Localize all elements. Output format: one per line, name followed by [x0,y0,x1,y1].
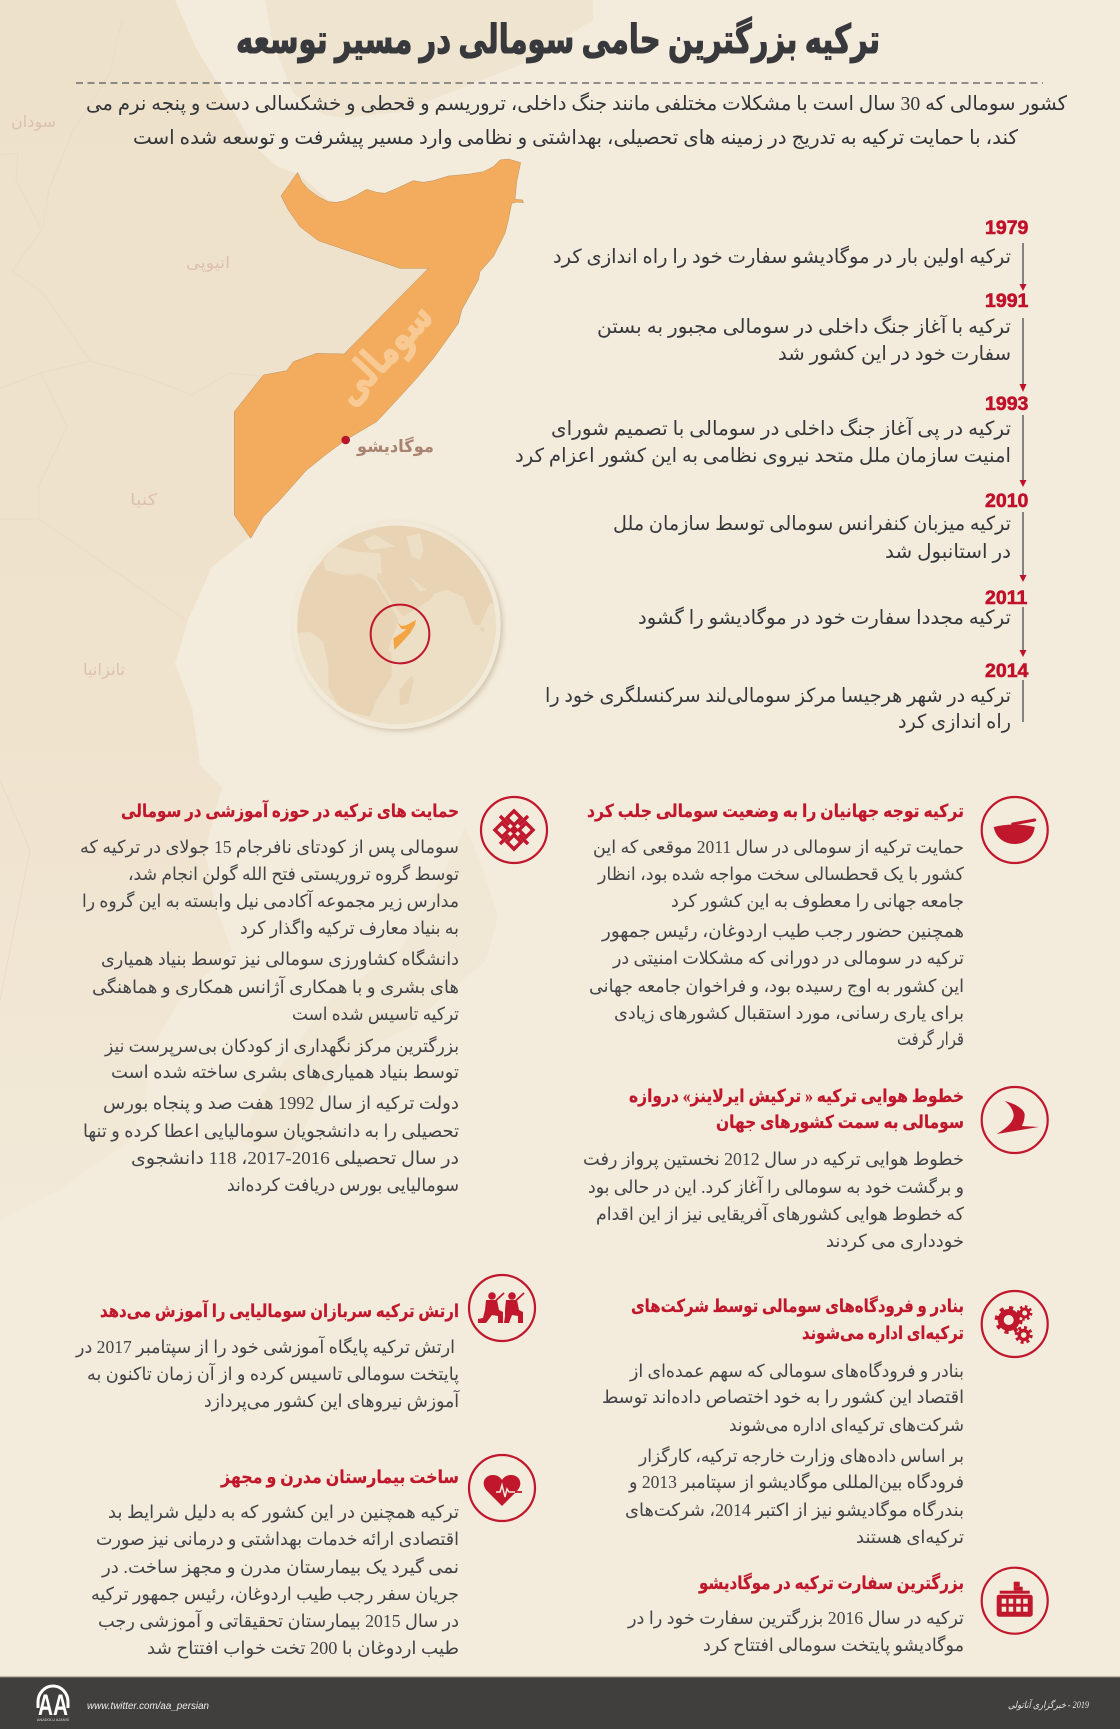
background map [0,0,593,1220]
timeline: 2010: ترکیه میزبان کنفرانس سومالی توسط سازمان ملل [613,514,1011,535]
heading: ارتش ترکیه سربازان سومالیایی را آموزش می‌دهد [100,1299,459,1322]
heading: سومالی به سمت کشورهای جهان [716,1112,964,1133]
map label: Somalia: سومالی [325,293,443,415]
timeline: 2014: راه اندازی کرد [898,712,1011,733]
body text: در سال 2015 بیمارستان تحقیقاتی و آموزشی رجب [98,1609,459,1632]
icon: embassy [982,1568,1048,1634]
body text: سومالیایی بورس دریافت کرده‌اند [227,1175,459,1196]
body text: برای یاری رسانی، مورد استقبال کشورهای زیادی [614,1003,964,1024]
panel: hospital [91,1455,535,1659]
body text: تحصیلی را به دانشجویان سومالیایی اعطا کرده و تنها [83,1121,459,1142]
body text [583,1149,964,1252]
footer [0,1677,1120,1729]
body text: قرار گرفت [897,1028,964,1050]
body text: و برگشت خود به سومالی را آغاز کرد. این در حالی بود [588,1175,964,1198]
intro text: کند، با حمایت ترکیه به تدریج در زمینه های تحصیلی، بهداشتی و نظامی وارد مسیر پیشرفت و توسعه شده است [133,127,1018,150]
body text: خودداری می کردند [826,1231,964,1252]
label: Ethiopia: اتیوپی [186,255,230,273]
icon: bowl [982,797,1048,863]
timeline: 1991: ترکیه با آغاز جنگ داخلی در سومالی مجبور به بستن [597,314,1011,338]
timeline: 1993: ترکیه در پی آغاز جنگ داخلی در سومالی با تصمیم شورای [551,416,1011,440]
body text: پایتخت سومالی تاسیس کرده و از آن زمان تاکنون به [87,1362,459,1385]
body text: شرکت‌های ترکیه‌ای اداره می‌شوند [729,1415,964,1436]
map marker: Mogadishu [342,436,350,444]
body text: بنادر و فرودگاه‌های سومالی که سهم عمده‌ای از [629,1360,964,1382]
timeline: 2010 [613,490,1029,582]
body text [91,1502,459,1659]
logo: Anadolu Agency [37,1686,69,1722]
timeline: 1979: ترکیه اولین بار در موگادیشو سفارت خود را راه اندازی کرد [553,245,1011,268]
panel: largest embassy [627,1568,1048,1656]
body text: توسط بنیاد همیاری‌های بشری ساخته شده است [111,1062,459,1083]
panel: world attention [587,797,1048,1050]
body text: ترکیه در سومالی در دورانی که مشکلات امنیتی در [612,948,964,969]
intro text: کشور سومالی که 30 سال است با مشکلات مختلفی مانند جنگ داخلی، تروریسم و قحطی و خشکسالی دست و پنجه نرم می [86,91,1067,116]
intro text [86,91,1067,150]
body text: طیب اردوغان با 200 تخت خواب افتتاح شد [147,1638,459,1659]
body text: ترکیه همچنین در این کشور که به دلیل شرایط بد [108,1502,459,1523]
panel: army training [75,1275,535,1412]
body text: جریان سفر رجب طیب اردوغان، رئیس جمهور ترکیه [91,1584,459,1605]
body text: دانشگاه کشاورزی سومالی نیز توسط بنیاد همیاری [101,948,459,970]
body text: اقتصادی ارائه خدمات بهداشتی و درمانی نیز صورت [96,1529,459,1550]
body text: توسط گروه تروریستی فتح الله گولن انجام شد، [128,863,459,885]
title divider [76,82,1043,84]
body text [75,1335,460,1412]
timeline: 2011 [638,587,1027,657]
panel: education support [80,797,547,1196]
heading: ساخت بیمارستان مدرن و مجهز [220,1467,459,1488]
body text: دولت ترکیه از سال 1992 هفت صد و پنجاه بورس [103,1093,459,1114]
timeline: 1993 [515,393,1029,487]
title: ترکیه بزرگترین حامی سومالی در مسیر توسعه [236,16,880,63]
timeline [515,217,1029,733]
heading: خطوط هوایی ترکیه « ترکیش ایرلاینز» دروازه [629,1086,964,1107]
body text: بندرگاه موگادیشو نیز از اکتبر 2014، شرکت‌های [625,1499,964,1521]
body text: بزرگترین مرکز نگهداری از کودکان بی‌سرپرست نیز [104,1035,459,1057]
heading: ترکیه‌ای اداره می‌شوند [802,1323,964,1344]
heading: ترکیه توجه جهانیان را به وضعیت سومالی جلب کرد [587,801,964,822]
logo: Anadolu Agency: ANADOLU AJANSI [37,1717,69,1722]
timeline: 1991: 1991 [985,290,1029,312]
body text: های بشری و با همکاری آژانس همکاری و هماهنگی [92,975,459,998]
body text: خطوط هوایی ترکیه در سال 2012 نخستین پرواز رفت [583,1149,964,1170]
body text: فرودگاه بین‌المللی موگادیشو از سپتامبر 2013 و [628,1471,964,1493]
timeline: 2011: 2011 [985,587,1027,609]
body text: ارتش ترکیه پایگاه آموزشی خود را از سپتامبر 2017 در [75,1335,455,1358]
timeline: 2011: ترکیه مجددا سفارت خود در موگادیشو را گشود [638,606,1011,629]
body text: کشور با یک قحطسالی سخت مواجه شده بود، انظار [597,864,964,885]
body text: موگادیشو پایتخت سومالی افتتاح کرد [703,1634,964,1656]
body text: که خطوط هوایی کشورهای آفریقایی نیز از این اقدام [596,1202,964,1225]
icon: ornament [481,797,547,863]
timeline: 2014: ترکیه در شهر هرجیسا مرکز سومالی‌لند سرکنسلگری خود را [545,684,1011,707]
logo: Anadolu Agency: AA [38,1689,68,1722]
panel: ports and airports [602,1291,1048,1548]
body text: جامعه جهانی را معطوف به این کشور کرد [671,891,964,912]
timeline: 1991 [597,290,1029,392]
map: Somalia [234,159,523,538]
body text: ترکیه در سال 2016 بزرگترین سفارت خود را در [627,1607,964,1629]
icon: airline bird [982,1087,1048,1153]
body text: اقتصاد این کشور را به خود اختصاص داده‌اند توسط [602,1387,964,1408]
body text: حمایت ترکیه از سومالی در سال 2011 موقعی که این [593,837,964,858]
icon: soldiers [469,1275,535,1341]
label: Kenya: کنیا [130,492,157,509]
timeline: 1993: امنیت سازمان ملل متحد نیروی نظامی به این کشور اعزام کرد [515,446,1011,467]
heading: بزرگترین سفارت ترکیه در موگادیشو [698,1572,964,1594]
body text: آموزش نیروهای این کشور می‌پردازد [204,1389,460,1412]
timeline: 1979 [553,217,1029,291]
heading [631,1295,964,1344]
locator globe [293,510,501,729]
icon: heart [469,1455,535,1521]
body text: بر اساس داده‌های وزارت خارجه ترکیه، کارگزار [638,1445,964,1467]
timeline: 2010: 2010 [985,490,1029,512]
body text: سومالی پس از کودتای نافرجام 15 جولای در ترکیه که [80,837,459,858]
panel: Turkish Airlines [583,1086,1048,1252]
footer credit: 2019 - خبرگزاری آناتولی [1008,1699,1089,1711]
body text [80,837,459,1196]
timeline: 1993: 1993 [985,393,1029,415]
body text: به بنیاد معارف ترکیه واگذار کرد [240,917,459,939]
body text: همچنین حضور رجب طیب اردوغان، رئیس جمهور [601,921,964,942]
timeline: 2010: در استانبول شد [885,542,1011,563]
body text [627,1607,964,1656]
body text: ترکیه تاسیس شده است [292,1004,459,1025]
body text: مدارس زیر مجموعه آکادمی نیل وابسته به این گروه را [82,889,459,912]
timeline: 2014 [545,660,1029,733]
body text [602,1360,964,1548]
body text [589,837,964,1050]
label: Sudan: سودان [11,114,56,132]
body text: این کشور به اوج رسیده بود، و فراخوان جامعه جهانی [589,976,964,997]
heading: بنادر و فرودگاه‌های سومالی توسط شرکت‌های [631,1295,964,1317]
timeline: 2014: 2014 [985,660,1029,682]
timeline: 1991: سفارت خود در این کشور شد [778,344,1011,365]
body text: ترکیه‌ای هستند [856,1527,964,1548]
body text: نمی گیرد یک بیمارستان مدرن و مجهز ساخت. در [101,1556,459,1578]
heading: حمایت های ترکیه در حوزه آموزشی در سومالی [121,799,459,822]
heading [629,1086,964,1133]
footer link: www.twitter.com/aa_persian [87,1700,209,1712]
icon: gears [982,1291,1048,1357]
map label: Mogadishu: موگادیشو [356,436,434,457]
label: Tanzania: تانزانیا [83,662,125,680]
body text: در سال تحصیلی 2016-2017، 118 دانشجوی [131,1148,459,1169]
timeline: 1979: 1979 [985,217,1029,239]
